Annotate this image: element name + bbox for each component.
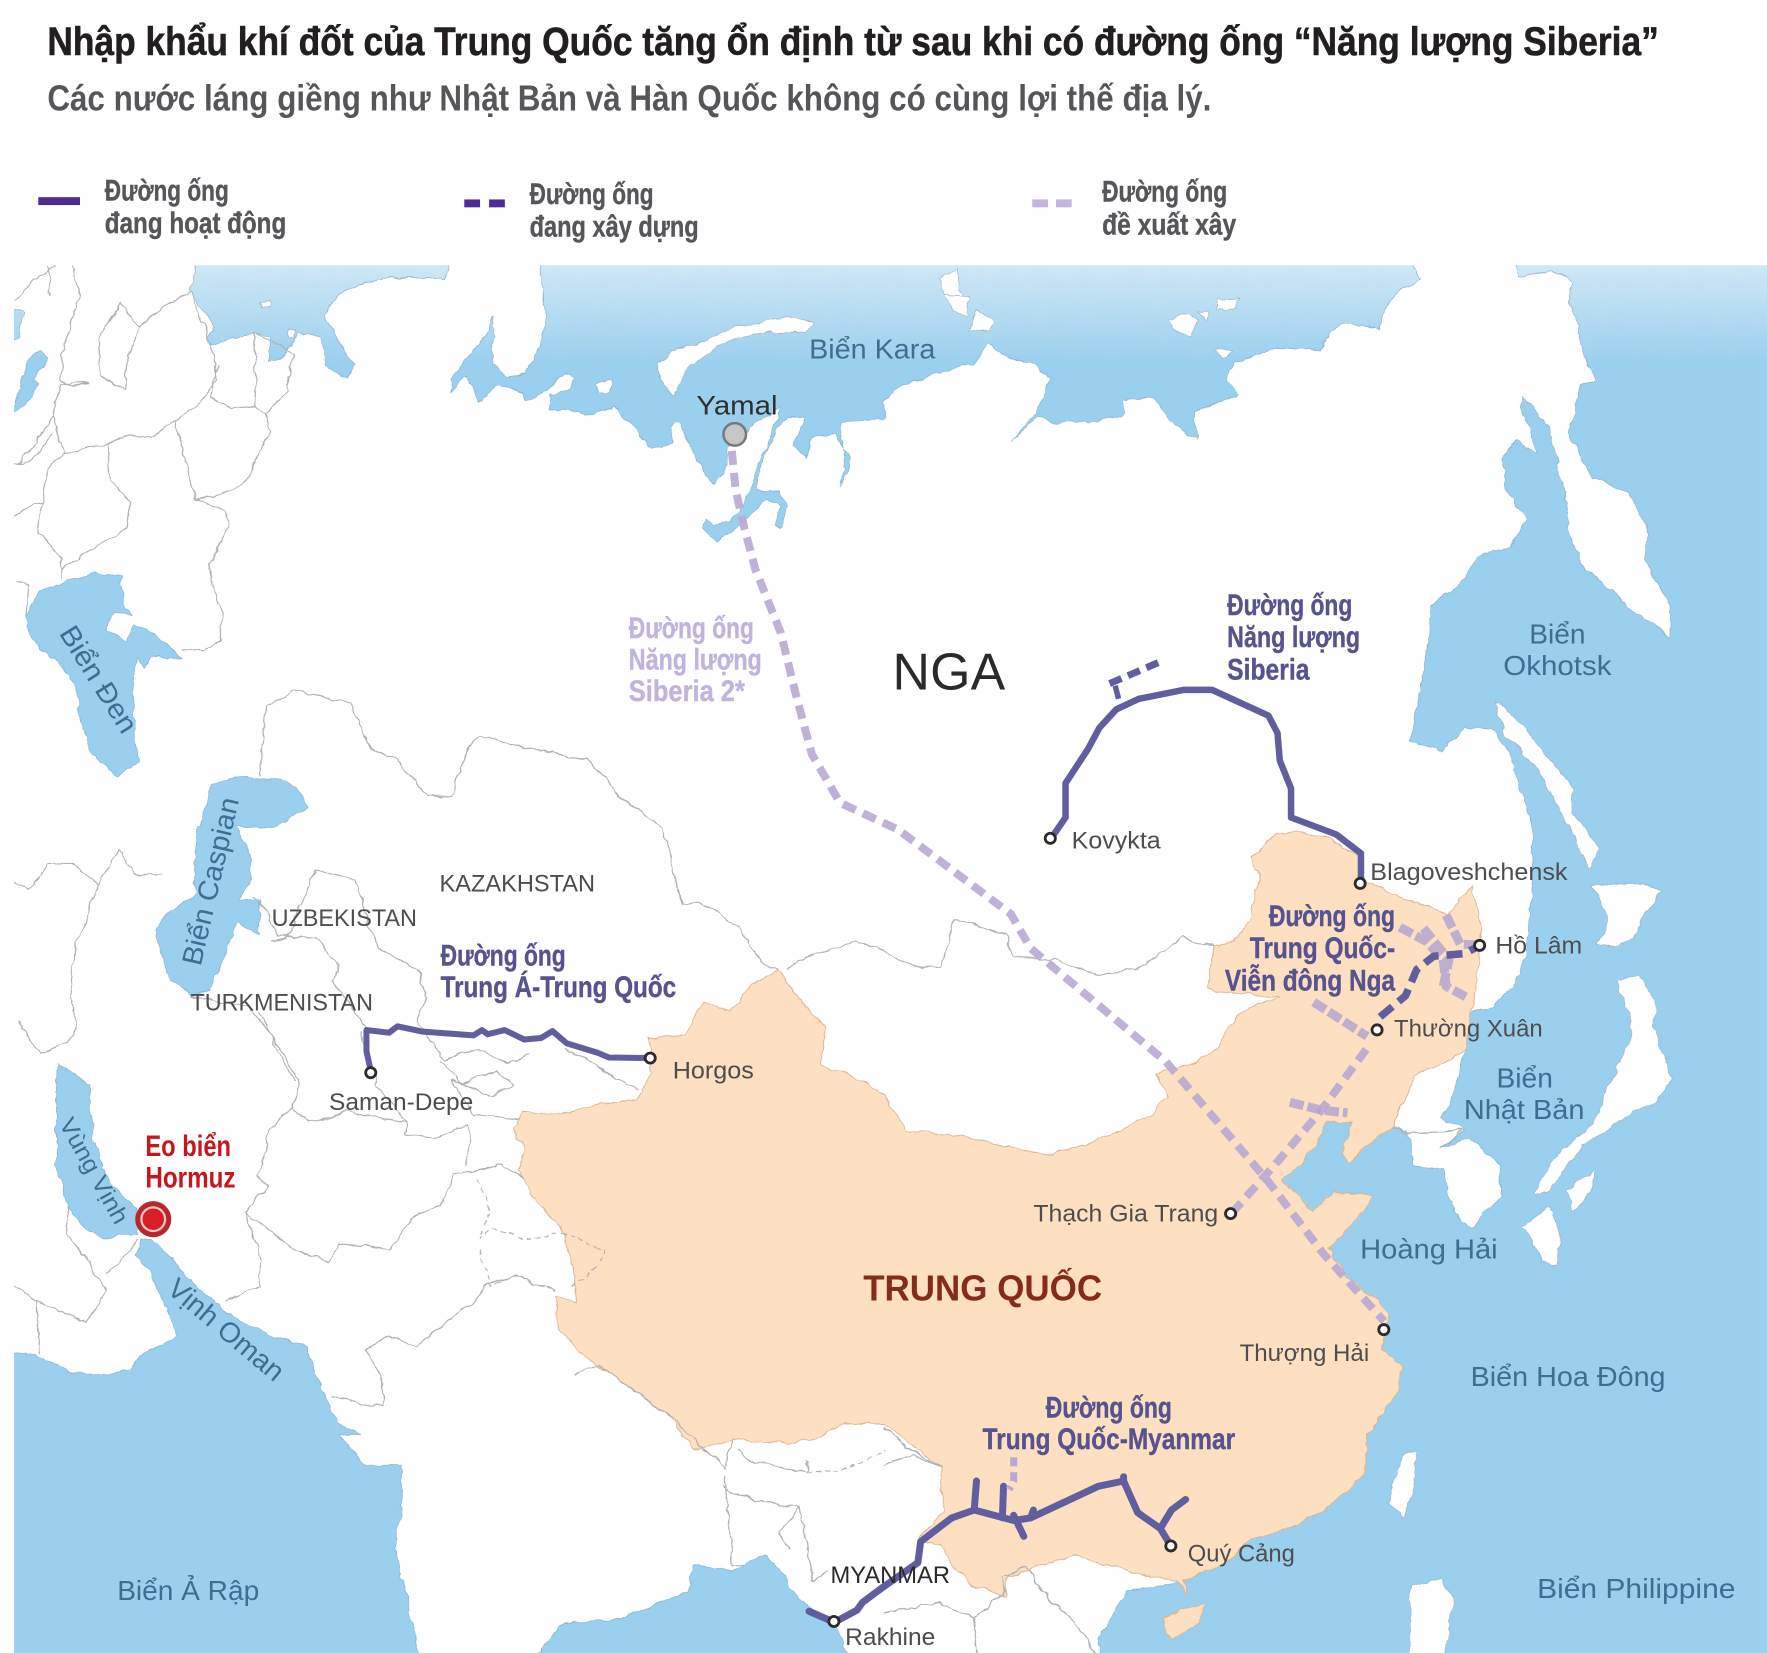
land: Hainan xyxy=(1160,1602,1205,1639)
island: Novaya Zemlya xyxy=(657,316,815,396)
proposed pipeline: Power of Siberia 2 xyxy=(732,451,1384,1321)
sea labels: Biển Hoa Đông xyxy=(1471,1360,1666,1392)
pipeline label: China-Myanmar: Trung Quốc-Myanmar xyxy=(983,1423,1235,1456)
sea labels: Nhật Bản xyxy=(1464,1093,1584,1125)
legend: active pipeline: đang hoạt động xyxy=(105,207,286,240)
proposed pipeline: branches in northeast China xyxy=(1290,915,1480,1113)
icons: pipeline end markers xyxy=(366,833,1485,1627)
sea: Black Sea xyxy=(25,572,183,778)
country labels: MYANMAR xyxy=(831,1563,950,1589)
island: Luzon xyxy=(1408,1579,1453,1653)
island: Sakhalin xyxy=(1496,701,1600,869)
icon: Yamal marker xyxy=(723,423,746,446)
pipeline label: China-Russia Far East: Đường ống xyxy=(1269,900,1395,933)
sea labels: Biển Đen xyxy=(54,619,145,739)
country labels xyxy=(190,643,1102,1589)
island: Hokkaido xyxy=(1592,885,1662,948)
subtitle: Các nước láng giềng như Nhật Bản và Hàn Quốc không có cùng lợi thế địa lý. xyxy=(47,77,1211,118)
island: Honshu xyxy=(1532,975,1673,1196)
city labels: Thạch Gia Trang xyxy=(1033,1201,1218,1227)
panel: pipelines xyxy=(366,451,1480,1622)
pipeline label: China-Russia Far East: Viễn đông Nga xyxy=(1225,963,1396,997)
country labels: NGA xyxy=(893,643,1006,701)
under construction: Siberia extension xyxy=(1110,660,1164,684)
callout: Strait of Hormuz label: Hormuz xyxy=(145,1162,236,1195)
city labels: Kovykta xyxy=(1072,828,1162,854)
pipeline label: Central Asia-China xyxy=(441,940,676,1004)
borders: Europe xyxy=(14,265,293,651)
sea labels: Hoàng Hải xyxy=(1360,1233,1498,1265)
sea: Baltic xyxy=(3,311,48,422)
pipeline label: Power of Siberia: Năng lượng xyxy=(1227,621,1360,654)
sea labels: Vịnh Oman xyxy=(162,1271,291,1387)
sea labels: Okhotsk xyxy=(1503,649,1612,681)
city labels: Rakhine xyxy=(845,1625,935,1651)
sea: Kara xyxy=(451,256,1422,541)
pipeline label: China-Russia Far East: Trung Quốc- xyxy=(1250,932,1395,965)
pipeline label: Power of Siberia 2 xyxy=(629,612,762,708)
borders: Southeast Asia xyxy=(884,1128,1462,1653)
island: Taiwan xyxy=(1389,1449,1417,1518)
country labels: UZBEKISTAN xyxy=(272,906,417,932)
city labels: Thượng Hải xyxy=(1240,1341,1369,1367)
pipeline label: China-Myanmar: Đường ống xyxy=(1046,1392,1172,1425)
city labels: Thường Xuân xyxy=(1394,1017,1543,1043)
land: country borders xyxy=(14,265,1462,1653)
icon: Hormuz marker xyxy=(135,1201,171,1237)
borders: Middle East and Central Asia xyxy=(14,848,829,1581)
pipeline label: Power of Siberia 2: Năng lượng xyxy=(629,643,762,676)
city labels: Horgos xyxy=(673,1058,754,1084)
sea labels: Biển Ả Rập xyxy=(117,1574,259,1606)
pipeline label: Power of Siberia: Siberia xyxy=(1227,653,1310,686)
islands: Arctic small xyxy=(259,269,1239,393)
legend: proposed xyxy=(1032,176,1237,241)
sea labels: Biển Caspian xyxy=(175,794,245,968)
active pipeline: Power of Siberia xyxy=(1051,690,1361,881)
sea: Bay of Bengal xyxy=(538,1554,848,1653)
land: China xyxy=(513,832,1482,1597)
country labels: KAZAKHSTAN xyxy=(439,871,595,897)
legend: proposed: Đường ống xyxy=(1102,176,1227,209)
pipeline label: Power of Siberia 2: Siberia 2* xyxy=(629,675,745,708)
city labels: Yamal xyxy=(696,391,778,421)
sea: Barents xyxy=(189,256,451,380)
city labels: Blagoveshchensk xyxy=(1370,860,1568,886)
under construction: China-Russia Far East xyxy=(1380,945,1480,1017)
callout: Strait of Hormuz label xyxy=(145,1130,236,1195)
city labels: Saman-Depe xyxy=(329,1090,473,1116)
sea: Persian Gulf xyxy=(56,1064,138,1238)
sea: Caspian xyxy=(155,775,307,996)
sea labels: Biển xyxy=(1497,1061,1553,1093)
legend: under construction xyxy=(464,178,699,244)
island: Shikoku xyxy=(1566,1170,1594,1212)
city labels xyxy=(329,391,1582,1651)
sea labels: Biển xyxy=(1529,617,1586,649)
pipeline label: Central Asia-China: Trung Á-Trung Quốc xyxy=(441,970,676,1004)
city labels: Quý Cảng xyxy=(1188,1542,1295,1568)
pipeline label: Power of Siberia: Đường ống xyxy=(1227,589,1352,622)
island: Kyushu xyxy=(1521,1207,1561,1265)
borders: Mongolia xyxy=(786,919,1214,975)
sea labels xyxy=(53,332,1735,1606)
borders: disputed dashed xyxy=(476,1180,884,1472)
sea: Pacific xyxy=(1098,256,1767,1653)
under construction: Power of Siberia branch xyxy=(1115,686,1119,699)
legend: active pipeline: Đường ống xyxy=(105,175,229,208)
land: islands xyxy=(259,269,1673,1653)
legend: active pipeline xyxy=(38,175,286,240)
country labels: TRUNG QUỐC xyxy=(863,1266,1102,1308)
legend: under construction: đang xây dựng xyxy=(530,211,699,244)
pipeline label: China-Myanmar xyxy=(983,1392,1235,1456)
proposed pipeline: Myanmar branch xyxy=(1009,1457,1014,1489)
active pipeline: Central Asia-China xyxy=(366,1026,648,1072)
country labels: TURKMENISTAN xyxy=(190,991,373,1017)
sea labels: Biển Philippine xyxy=(1537,1572,1735,1604)
sea labels: Vùng Vịnh xyxy=(53,1114,133,1229)
legend: under construction: Đường ống xyxy=(530,178,654,211)
legend: proposed: đề xuất xây xyxy=(1102,208,1237,241)
callout: Strait of Hormuz label: Eo biển xyxy=(145,1130,231,1163)
proposed pipeline: Thach Gia Trang to Thuong Xuan xyxy=(1232,1044,1370,1213)
pipeline label: China-Russia Far East xyxy=(1225,900,1396,997)
pipeline label: Central Asia-China: Đường ống xyxy=(441,940,566,973)
borders: Kazakhstan and Russia xyxy=(259,691,778,969)
sea labels: Biển Kara xyxy=(809,332,936,364)
pipeline label: Power of Siberia xyxy=(1227,589,1360,686)
pipeline label: Power of Siberia 2: Đường ống xyxy=(629,612,754,645)
sea: Arabian xyxy=(3,1238,428,1653)
city labels: Hồ Lâm xyxy=(1495,933,1582,959)
active pipeline: China-Myanmar xyxy=(809,1477,1186,1622)
